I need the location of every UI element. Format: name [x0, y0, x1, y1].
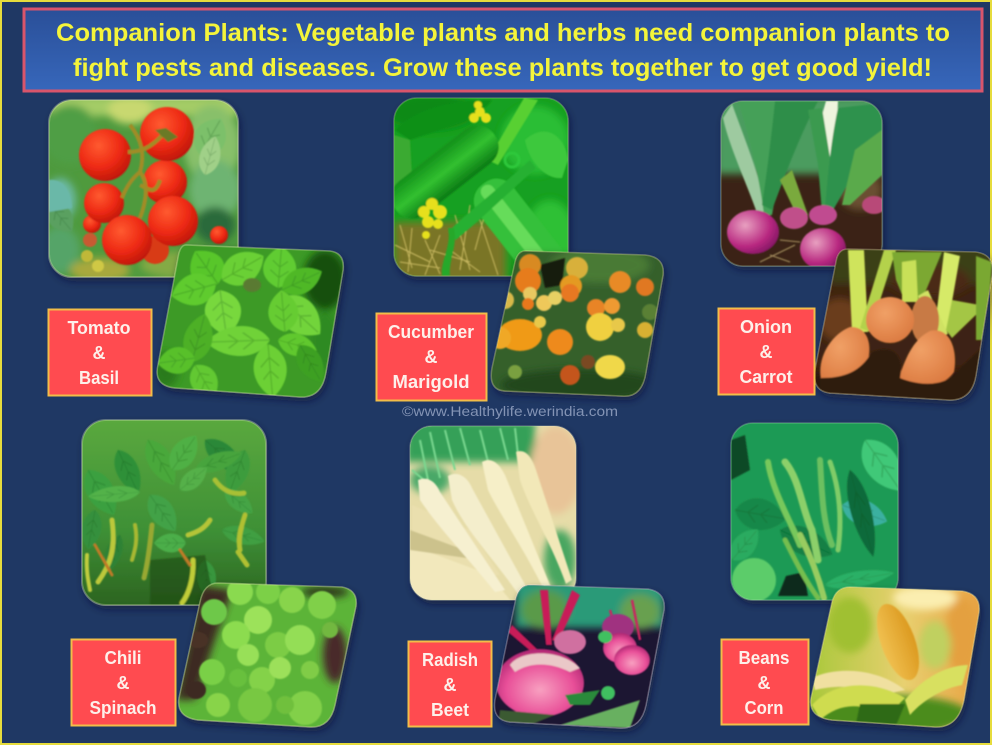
label: Cucumber & Marigold: Marigold	[392, 372, 470, 392]
label: Radish & Beet	[408, 642, 492, 726]
panel: carrot photo	[810, 244, 992, 404]
panel: spinach photo	[175, 579, 360, 730]
label: Onion & Carrot: Carrot	[740, 367, 792, 387]
label: Chili & Spinach	[72, 640, 176, 726]
label: Radish & Beet: Beet	[431, 700, 469, 720]
label: Chili & Spinach: Spinach	[90, 698, 156, 718]
title banner	[24, 9, 982, 91]
label: Chili & Spinach: &	[116, 673, 130, 693]
label: Radish & Beet: &	[444, 675, 456, 695]
label: Tomato & Basil: &	[92, 343, 106, 363]
panel: corn photo	[808, 585, 983, 735]
panel: onion photo	[716, 96, 888, 270]
label: Onion & Carrot	[718, 308, 814, 394]
title banner: fight pests and diseases. Grow these plants together to get good yield!	[73, 54, 932, 82]
label: Chili & Spinach: Chili	[104, 648, 142, 668]
label: Tomato & Basil: Tomato	[68, 318, 130, 338]
panel: beans photo	[724, 423, 914, 602]
label: Beans & Corn: &	[758, 673, 770, 693]
panel: chili photo	[76, 420, 267, 605]
label: Onion & Carrot: Onion	[740, 317, 792, 337]
label: Radish & Beet: Radish	[422, 650, 478, 670]
label: Tomato & Basil: Basil	[79, 368, 119, 388]
label: Beans & Corn: Corn	[744, 698, 784, 718]
label: Cucumber & Marigold: &	[424, 347, 438, 367]
label: Beans & Corn	[722, 640, 808, 724]
panel: cucumber photo	[393, 97, 573, 283]
label: Tomato & Basil	[48, 310, 152, 396]
panel: beet photo	[490, 580, 668, 731]
watermark: ©www.Healthylife.werindia.com	[402, 404, 618, 419]
panel: tomato photo	[40, 96, 241, 282]
label: Beans & Corn: Beans	[738, 648, 790, 668]
title banner: Companion Plants: Vegetable plants and herbs need companion plants to	[56, 19, 950, 47]
panel: basil photo	[150, 240, 350, 405]
panel: marigold photo	[488, 247, 666, 401]
label: Cucumber & Marigold: Cucumber	[388, 322, 474, 342]
label: Cucumber & Marigold	[376, 314, 486, 400]
label: Onion & Carrot: &	[760, 342, 772, 362]
panel: radish photo	[405, 420, 582, 600]
